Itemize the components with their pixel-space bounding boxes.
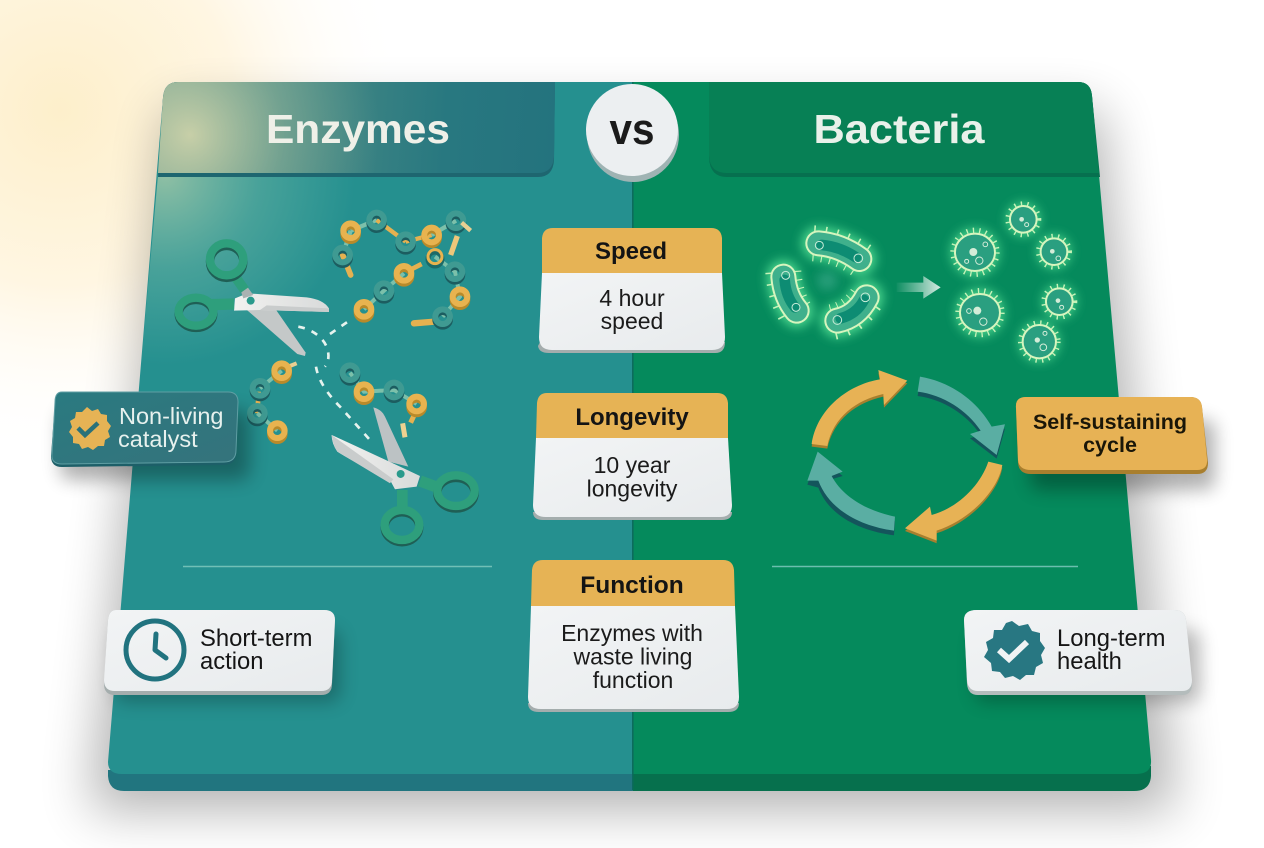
arrow: growth: [897, 276, 941, 299]
glow: [783, 243, 867, 321]
board edge left: [108, 770, 634, 791]
Longevity value: longevity: [587, 476, 678, 502]
callout: Short-term action: [104, 610, 340, 702]
Bacteria title: Bacteria: [814, 106, 986, 152]
bacteria side surface: [632, 82, 1151, 774]
chain middle: [357, 264, 422, 320]
chain right: [414, 250, 467, 327]
label text: Long-term: [1057, 625, 1165, 652]
enzyme illustration: scissors and chains: [179, 213, 475, 542]
rod bacteria group: [782, 241, 870, 324]
blurred centre spot: [817, 271, 837, 290]
Speed value: speed: [601, 308, 663, 334]
cells: [953, 204, 1075, 360]
label text: health: [1057, 648, 1122, 675]
bacteria illustration: [782, 203, 1076, 543]
Function value: Enzymes with: [561, 620, 703, 646]
light ray overlay: [138, 175, 400, 400]
Enzymes title: Enzymes: [266, 106, 450, 152]
icon: clock: [126, 621, 184, 679]
board: two-sided panel: [108, 82, 1151, 791]
rod bodies: [783, 243, 867, 321]
card: Speed: [538, 228, 725, 353]
callout: Self-sustaining cycle: [1016, 397, 1215, 490]
teal arrow left: [807, 452, 895, 535]
Function value: waste living: [573, 644, 692, 670]
vs badge: [586, 84, 679, 182]
header: Bacteria: [709, 82, 1100, 177]
chain lower left: [250, 363, 297, 441]
Longevity heading: [536, 393, 728, 438]
board edge right: [633, 766, 1151, 791]
dashed cut line: [298, 322, 370, 440]
enzymes side surface: [108, 82, 633, 774]
chain upper left: [335, 213, 471, 275]
Speed heading text: Speed: [595, 238, 667, 265]
board shadow: [90, 110, 1175, 810]
Function heading: [531, 560, 735, 606]
Speed heading: [542, 228, 722, 273]
vs text: vs: [610, 105, 654, 154]
card: Longevity: [533, 393, 732, 520]
spikes: [783, 243, 869, 322]
label text: action: [200, 648, 264, 675]
label text: Self-sustaining: [1033, 410, 1187, 434]
chain lower right: [343, 365, 424, 437]
yellow arrow top: [812, 370, 907, 449]
cycle arrows: [807, 370, 1005, 543]
Speed value: 4 hour: [599, 285, 665, 311]
scissors upper: [179, 243, 329, 356]
label text: catalyst: [118, 426, 198, 452]
header: Enzymes: [158, 82, 555, 177]
callout: Long-term health: [964, 610, 1200, 702]
label text: Non-living: [119, 403, 224, 429]
yellow arrow bottom: [905, 462, 1002, 543]
scissors lower: [332, 407, 475, 542]
card: Function: [528, 560, 739, 712]
glow: [951, 203, 1076, 362]
Longevity value: 10 year: [594, 452, 670, 478]
callout: Non-living catalyst: [51, 392, 250, 480]
icon: teal seal check: [984, 621, 1045, 680]
icon: gold seal check: [69, 407, 111, 450]
Function heading text: Function: [580, 572, 684, 599]
teal arrow right: [918, 377, 1005, 459]
dividers: [183, 566, 1078, 568]
round bacteria group: [951, 203, 1076, 362]
label text: cycle: [1083, 433, 1137, 457]
Longevity heading text: Longevity: [575, 404, 689, 431]
Function value: function: [593, 667, 673, 693]
label text: Short-term: [200, 625, 312, 652]
